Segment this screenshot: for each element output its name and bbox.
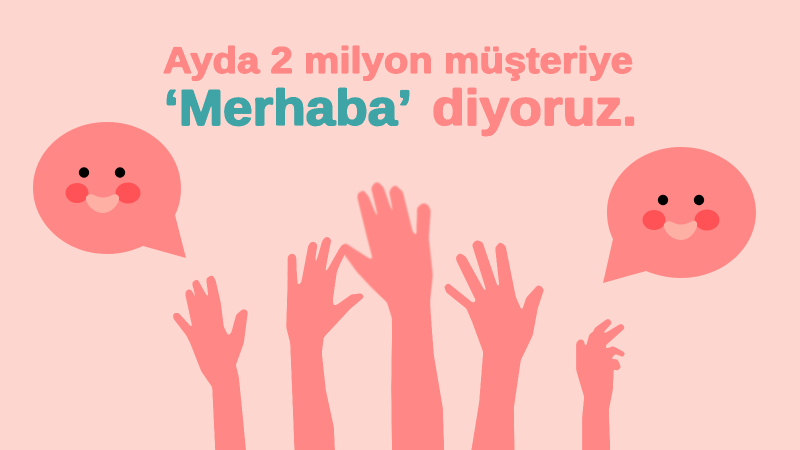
mouth — [86, 194, 119, 213]
title line 1: Ayda 2 milyon müşteriye — [163, 40, 633, 81]
hand 4 — [445, 241, 543, 450]
speech bubble: right smiling face — [603, 147, 756, 283]
bubble body — [33, 122, 186, 258]
hand 1 — [174, 276, 247, 450]
hand 5 — [577, 321, 624, 450]
eyes — [658, 195, 704, 205]
forearm — [376, 250, 444, 450]
highlighted word: Merhaba: ‘Merhaba’ — [164, 80, 412, 136]
cheeks — [642, 210, 720, 230]
title — [163, 40, 637, 136]
speech bubble: left smiling face — [33, 122, 186, 258]
waving palm and fingers — [342, 183, 432, 330]
bubble body — [603, 147, 756, 283]
mouth — [664, 221, 697, 240]
hand 3 waving — [342, 183, 444, 450]
title line 2 ending: diyoruz. — [432, 80, 637, 136]
hand 2 — [287, 238, 363, 450]
eyes — [79, 167, 125, 178]
cheeks — [66, 182, 140, 204]
